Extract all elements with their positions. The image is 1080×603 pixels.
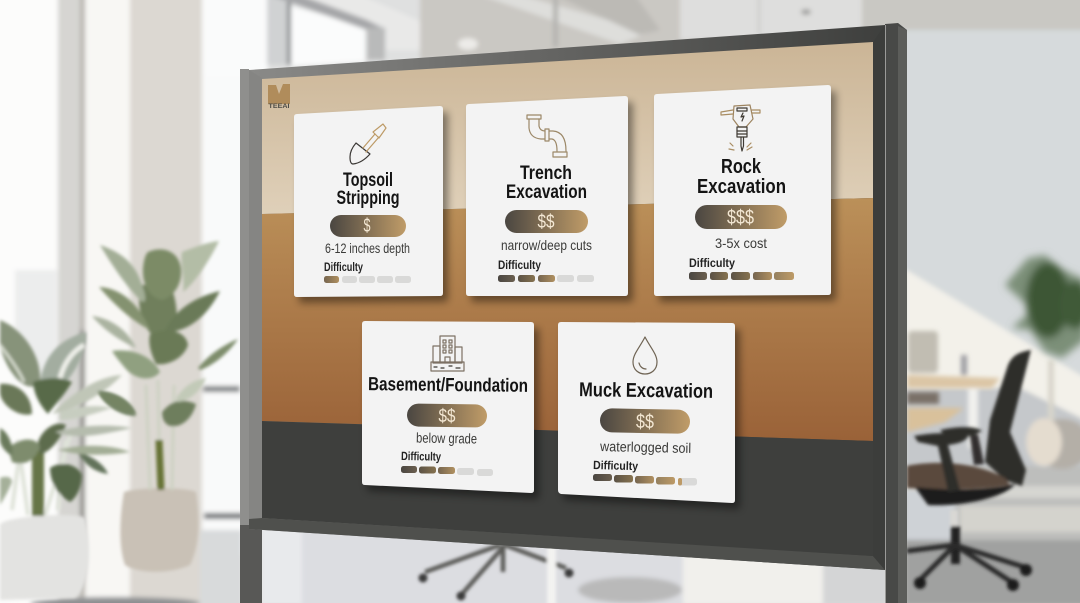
heading: Trench — [520, 163, 572, 184]
heading: Basement/Foundation — [368, 374, 528, 397]
heading: Excavation — [697, 176, 786, 198]
heading: Muck Excavation — [579, 379, 713, 403]
cost pill: $$ — [636, 411, 654, 433]
description: narrow/deep cuts — [501, 237, 592, 253]
cost pill: $ — [364, 216, 371, 237]
heading: Stripping — [336, 188, 400, 209]
chair base under the board — [418, 540, 574, 603]
cost pill — [600, 408, 690, 434]
display board frame and posts — [240, 23, 907, 603]
card: basement/foundation — [362, 321, 539, 499]
cost pill — [407, 403, 487, 428]
logo — [268, 84, 290, 110]
icon: pipe — [527, 115, 567, 157]
cost pill — [695, 205, 787, 229]
icon: jackhammer — [721, 105, 760, 151]
description: 6-12 inches depth — [325, 240, 410, 256]
logo: TEEAI — [268, 103, 290, 110]
icon: shovel — [350, 124, 386, 164]
difficulty meter: Difficulty — [689, 256, 735, 270]
icon: building — [431, 336, 464, 371]
board outer frame — [249, 25, 885, 570]
cost pill: $$$ — [727, 207, 754, 229]
difficulty meter — [324, 260, 411, 283]
heading: Excavation — [506, 182, 587, 203]
description: waterlogged soil — [599, 438, 691, 456]
left potted plant — [0, 320, 136, 600]
heading: Rock — [721, 156, 762, 178]
difficulty meter: Difficulty — [593, 458, 639, 473]
description: 3-5x cost — [715, 235, 767, 251]
difficulty meter — [689, 256, 794, 280]
panel: bottom dark band — [262, 421, 873, 556]
panel: middle brown band — [262, 198, 873, 441]
left post — [240, 69, 262, 603]
card: topsoil stripping — [294, 106, 448, 303]
difficulty meter: Difficulty — [498, 258, 541, 272]
card: trench excavation — [466, 96, 633, 302]
centre potted plant — [92, 241, 238, 572]
difficulty meter: Difficulty — [401, 449, 441, 464]
difficulty meter — [401, 449, 493, 476]
card: muck excavation — [558, 322, 740, 509]
difficulty meter — [593, 458, 697, 486]
right post — [885, 23, 907, 603]
difficulty meter — [498, 258, 594, 282]
difficulty meter: Difficulty — [324, 260, 363, 274]
cost pill — [330, 215, 406, 237]
description: below grade — [416, 429, 477, 447]
card: rock excavation — [654, 85, 836, 302]
panel: top tan band — [262, 42, 873, 214]
icon: water drop — [633, 337, 657, 374]
cost pill — [505, 210, 588, 233]
heading: Topsoil — [343, 170, 393, 191]
cost pill: $$ — [438, 406, 456, 427]
cost pill: $$ — [538, 212, 555, 233]
office chair — [907, 350, 1032, 591]
right background plant and desks — [907, 255, 1080, 469]
